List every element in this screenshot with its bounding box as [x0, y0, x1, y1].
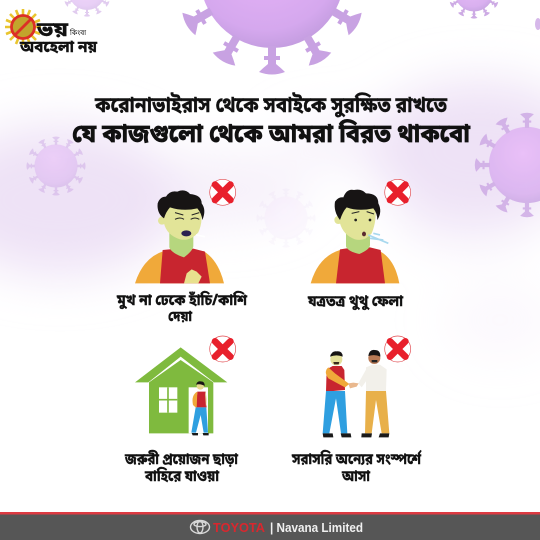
icon: red cross: [385, 179, 411, 205]
footer brand: TOYOTA: [213, 520, 266, 535]
logo wordmark: [19, 19, 98, 59]
caption: [291, 449, 422, 488]
caption: দেয়া: [168, 308, 193, 327]
icon: Toyota emblem: [190, 520, 210, 534]
virus: right edge fragment: [535, 18, 540, 30]
item: spitting person: [307, 179, 411, 313]
illustration: coughing man: [135, 190, 224, 283]
icon: red cross: [210, 179, 236, 205]
virus: faint centre: [256, 188, 316, 248]
footer bar: [0, 512, 540, 540]
logo wordmark: অবহেলা নয়: [19, 37, 98, 59]
virus: top left: [62, 0, 112, 17]
caption: সরাসরি অন্যের সংস্পর্শে: [291, 449, 422, 471]
caption: আসা: [341, 468, 371, 488]
illustration: green house with man: [135, 347, 227, 435]
caption: বাহিরে যাওয়া: [144, 467, 220, 488]
logo wordmark: কিংবা: [69, 29, 86, 38]
caption: [124, 450, 239, 488]
illustration: two men shaking hands: [323, 350, 389, 437]
footer partner: | Navana Limited: [270, 520, 363, 535]
virus: right: [475, 113, 540, 217]
virus: left: [26, 136, 86, 196]
caption: [116, 290, 247, 327]
icon: red cross: [210, 336, 236, 362]
caption: জরুরী প্রয়োজন ছাড়া: [124, 450, 239, 471]
caption: যত্রতত্র থুথু ফেলা: [307, 293, 404, 313]
icon: red cross: [385, 336, 411, 362]
virus: top right: [447, 0, 501, 19]
logo icon: crossed virus: [5, 9, 41, 45]
virus: large top centre: [174, 0, 370, 74]
item: going outside: [124, 336, 239, 488]
item: direct contact: [291, 336, 422, 488]
headline line 2: যে কাজগুলো থেকে আমরা বিরত থাকবো: [72, 119, 471, 153]
item: coughing person: [116, 179, 247, 327]
headline line 1: করোনাভাইরাস থেকে সবাইকে সুরক্ষিত রাখতে: [94, 93, 447, 121]
logo: [5, 9, 98, 59]
illustration: spitting man: [311, 190, 399, 283]
caption: মুখ না ঢেকে হাঁচি/কাশি: [116, 290, 247, 312]
logo wordmark: ভয়: [36, 19, 69, 45]
